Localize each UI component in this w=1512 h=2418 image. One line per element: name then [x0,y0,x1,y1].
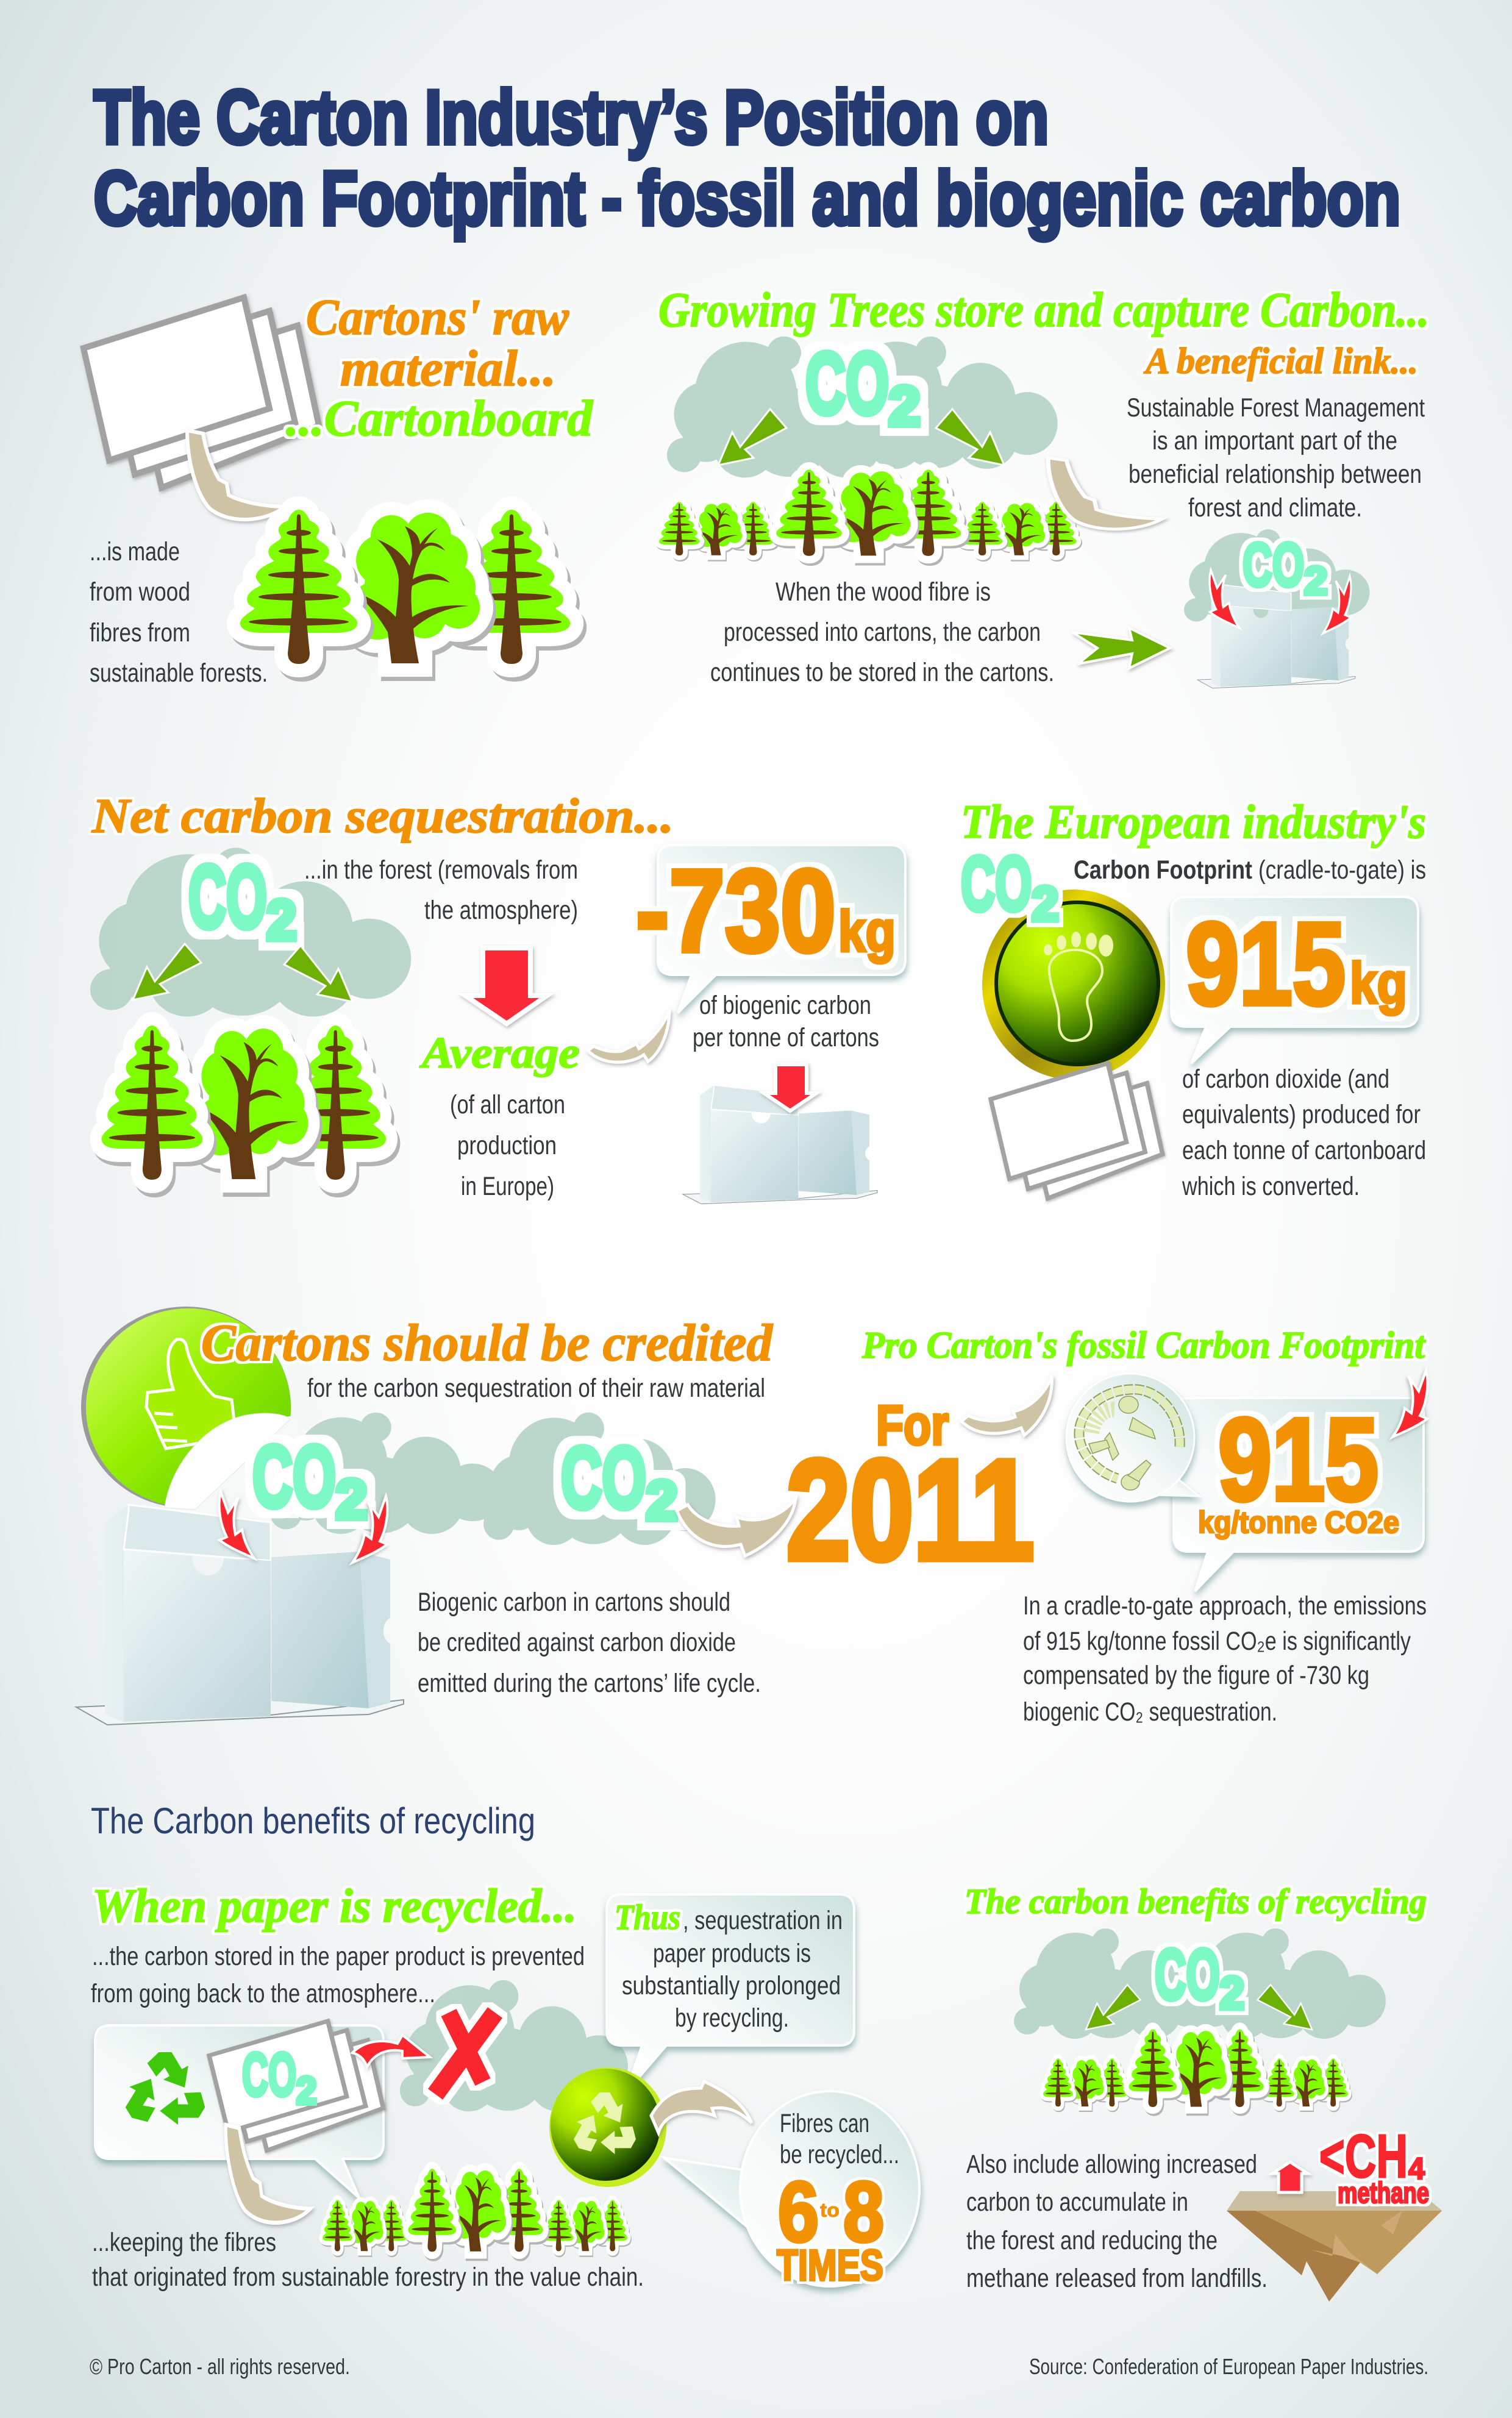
arrow: green right [936,409,1004,465]
text: wood fibre: processed into cartons, the carbon [724,618,1041,647]
icon: thumbs up sticker [81,1307,299,1518]
text: carbon dioxide produced: equivalents) produced for [1182,1100,1421,1129]
arrow: forest to link [1048,458,1162,529]
text: in the forest: the atmosphere) [424,896,578,925]
icon: trees [101,1025,388,1184]
callout: 915 kg: kg [1350,951,1407,1016]
arrow: green right [1257,1985,1312,2030]
arrow: for to fossil [961,1376,1052,1435]
text: for the carbon sequestration: for the carbon sequestration of their raw material [307,1374,765,1403]
text: of all carton production: (of all carton [450,1090,565,1119]
arrow: green left [133,944,201,1000]
arrow: red down [465,948,547,1024]
arrow: CO2 to 2011 [677,1499,796,1556]
heading: european industry: The European industry's [961,795,1426,848]
icon: clouds [271,1413,716,1545]
label: less methane: <CH [1319,2122,1408,2191]
text: sustainable forest management: Sustainable Forest Management [1127,393,1425,423]
callout: thus sequestration [607,1894,854,2093]
heading: net carbon sequestration: Net carbon sequestration... [91,790,674,843]
arrow: red down [1393,1371,1427,1437]
text: made from wood: fibres from [90,618,190,647]
panel: when paper is recycled [91,1879,919,2292]
callout: 915 kg/tonne [1174,1394,1424,1591]
text: also include: methane released from landfills. [966,2264,1268,2293]
text: carbon dioxide produced: of carbon dioxide (and [1182,1065,1389,1094]
arrow: green left [718,409,786,465]
heading: cartons raw material: ...Cartonboard [286,390,594,447]
arrow: ball to bubble [651,2081,752,2133]
text: sustainable forest management: beneficial relationship between [1129,460,1422,489]
icon: CO2 label left: CO [252,1428,336,1525]
callout: fibres can be recycled: 8 [843,2164,884,2259]
panel: cartons raw material [84,289,594,688]
heading: when paper is recycled: When paper is recycled... [92,1879,577,1932]
icon: recycle ball [549,2067,666,2187]
text: keeping the fibres [92,2228,644,2292]
text: keeping the fibres: ...keeping the fibres [92,2228,276,2257]
text: made from wood: from wood [90,577,190,607]
icon: forest [659,469,1077,558]
callout: -730 kg: kg [838,899,896,964]
callout: 915 kg/tonne: 915 [1218,1394,1378,1525]
footer: copyright: © Pro Carton - all rights reserved. [90,2354,350,2379]
callout: fibres can be recycled [664,2091,919,2290]
text: of all carton production [450,1090,565,1201]
text: carbon stored [91,1942,585,2008]
callout: thus sequestration: , sequestration in [683,1906,843,1935]
icon: carton with CO2 [1184,529,1370,688]
heading: cartons raw material: material... [340,340,556,397]
callout: thus sequestration: paper products is [653,1939,811,1968]
text: biogenic carbon credited: be credited against carbon dioxide [418,1628,736,1657]
callout: thus sequestration: by recycling. [675,2003,789,2033]
text: biogenic carbon [693,991,879,1052]
text: biogenic carbon: per tonne of cartons [693,1023,879,1052]
icon: forest [323,2169,628,2254]
icon: carton with CO2: CO [1243,530,1304,599]
text: of all carton production: production [457,1131,557,1160]
icon: carton with red arrow [683,1065,877,1204]
icon: sheets with CO2: CO [242,2041,296,2109]
icon: cloud [400,1980,628,2111]
text: carbon dioxide produced [1182,1065,1426,1201]
text: carbon dioxide produced: each tonne of cartonboard [1182,1136,1426,1165]
panel: carbon benefits of recycling [965,1881,1442,2302]
callout: -730 kg: -730 [636,845,836,976]
text: also include: carbon to accumulate in [966,2188,1188,2217]
icon: sheets with CO2 [209,2021,383,2150]
callout: recycling bubble [95,2025,383,2198]
icon: CO2 label: 2 [267,888,296,951]
icon: CO2 label right: 2 [646,1471,677,1532]
label: for 2011: For [876,1394,949,1457]
icon: large carton [76,1505,404,1725]
icon: recycle symbol [117,2052,211,2131]
text: wood fibre: continues to be stored in the cartons. [710,658,1054,687]
text: wood fibre [710,577,1054,687]
text: cradle to gate: biogenic CO₂ sequestration. [1023,1697,1277,1727]
text: also include [966,2150,1268,2293]
text: also include: the forest and reducing the [966,2226,1218,2255]
callout: 915 kg/tonne: kg/tonne CO2e [1198,1505,1399,1539]
icon: CO2 label: CO [805,335,889,432]
icon: CO2 label: CO [961,841,1032,927]
panel: net carbon sequestration [90,790,905,1204]
icon: CO2 label: 2 [1032,878,1058,931]
text: made from wood: ...is made [90,537,180,566]
text: carbon footprint [1074,855,1426,885]
icon: fossil bubble [1066,1374,1199,1502]
icon: carton with CO2: 2 [1304,559,1327,602]
heading: cartons raw material: Cartons' raw [306,289,569,346]
text: sustainable forest management: is an important part of the [1152,426,1397,455]
text: biogenic carbon: of biogenic carbon [699,991,871,1020]
arrow: green right [284,946,352,1002]
text: cradle to gate [1023,1591,1427,1727]
icon: forest [1043,2029,1349,2110]
callout: 915 kg: 915 [1186,898,1346,1029]
icon: cartonboard sheets [84,298,319,488]
text: biogenic carbon credited [418,1588,761,1698]
arrow: sheets to trees [187,430,285,519]
text: in the forest: ...in the forest (removals from [304,855,578,885]
label: for 2011 [786,1394,1034,1589]
label: average: Average [419,1029,580,1077]
panel: growing trees [658,284,1429,688]
icon: CO2 label: CO [1155,1935,1220,2015]
arrow: red curved [352,2035,430,2067]
text: cradle to gate: of 915 kg/tonne fossil CO₂e is significantly [1023,1627,1411,1656]
icon: sheets with CO2: 2 [296,2069,316,2112]
section heading: carbon benefits of recycling: The Carbon benefits of recycling [91,1800,535,1841]
icon: trees [240,510,573,668]
label: less methane: 4 [1408,2152,1425,2186]
text: carbon stored: ...the carbon stored in the paper product is prevented [92,1942,585,1971]
callout: fibres can be recycled: 6 [778,2164,819,2259]
icon: landfill [1227,2191,1442,2302]
icon: CO2 label: CO [188,847,267,946]
panel: cartons should be credited [76,1307,796,1725]
icon: CO2 label right: CO [561,1430,646,1527]
arrow: average to figure [588,1010,669,1062]
heading: carbon benefits: The carbon benefits of recycling [965,1881,1427,1921]
icon: CO2 label: 2 [1220,1969,1244,2019]
text: carbon stored: from going back to the atmosphere... [91,1979,435,2008]
heading: cartons should be credited: Cartons should be credited [201,1313,774,1372]
icon: footprint medallion [982,890,1165,1080]
callout: fibres can be recycled: to [820,2199,840,2221]
arrow: green to carton [1072,628,1170,668]
callout: fibres can be recycled: TIMES [777,2242,883,2290]
icon: clouds [667,337,1058,477]
text: sustainable forest management: forest and climate. [1188,493,1362,522]
callout: thus sequestration: Thus [615,1897,680,1937]
icon: cloud [90,847,411,1016]
callout: 915 kg [1171,897,1418,1063]
callout: -730 kg [636,845,905,1013]
text: carbon footprint: Carbon Footprint [1074,855,1252,885]
text: sustainable forest management [1127,393,1425,522]
arrow: red left [219,1492,254,1558]
panel: pro carton fossil footprint [786,1325,1427,1727]
title [94,76,1400,241]
text: carbon dioxide produced: which is converted. [1182,1172,1360,1201]
callout: fibres can be recycled: Fibres can [780,2109,869,2138]
text: also include: Also include allowing increased [966,2150,1257,2179]
panel: european industry footprint [961,795,1426,1201]
text: in the forest [304,855,578,925]
subheading: beneficial link: A beneficial link... [1143,341,1418,381]
text: biogenic carbon credited: emitted during the cartons’ life cycle. [418,1669,761,1698]
arrow: sheets to forest [226,2125,310,2223]
callout: thus sequestration: substantially prolonged [622,1971,841,2000]
arrow: red up [1272,2162,1308,2192]
text: carbon footprint: (cradle-to-gate) is [1258,855,1426,885]
title: The Carton Industry’s Position on [94,76,1049,160]
icon: clouds [1014,1928,1386,2039]
icon: CO2 label left: 2 [336,1469,367,1530]
heading: growing trees: Growing Trees store and capture Carbon... [658,284,1429,337]
icon: CO2 label: 2 [889,376,920,437]
text: of all carton production: in Europe) [461,1172,554,1201]
text: cradle to gate: compensated by the figure of -730 kg [1023,1661,1369,1690]
arrow: green left [1086,1985,1141,2030]
icon: red cross [435,2013,495,2094]
text: keeping the fibres: that originated from sustainable forestry in the value chain. [92,2263,644,2292]
text: made from wood [90,537,268,688]
text: wood fibre: When the wood fibre is [776,577,991,607]
callout: fibres can be recycled: be recycled... [780,2140,899,2169]
text: made from wood: sustainable forests. [90,658,268,688]
arrow: red right [352,1496,387,1563]
icon: cartonboard sheets [991,1063,1163,1199]
text: biogenic carbon credited: Biogenic carbon in cartons should [418,1588,730,1617]
heading: fossil carbon footprint: Pro Carton's fossil Carbon Footprint [861,1325,1426,1366]
label: for 2011: 2011 [786,1431,1034,1589]
heading: cartons raw material [286,289,594,447]
label: less methane: methane [1338,2177,1429,2209]
